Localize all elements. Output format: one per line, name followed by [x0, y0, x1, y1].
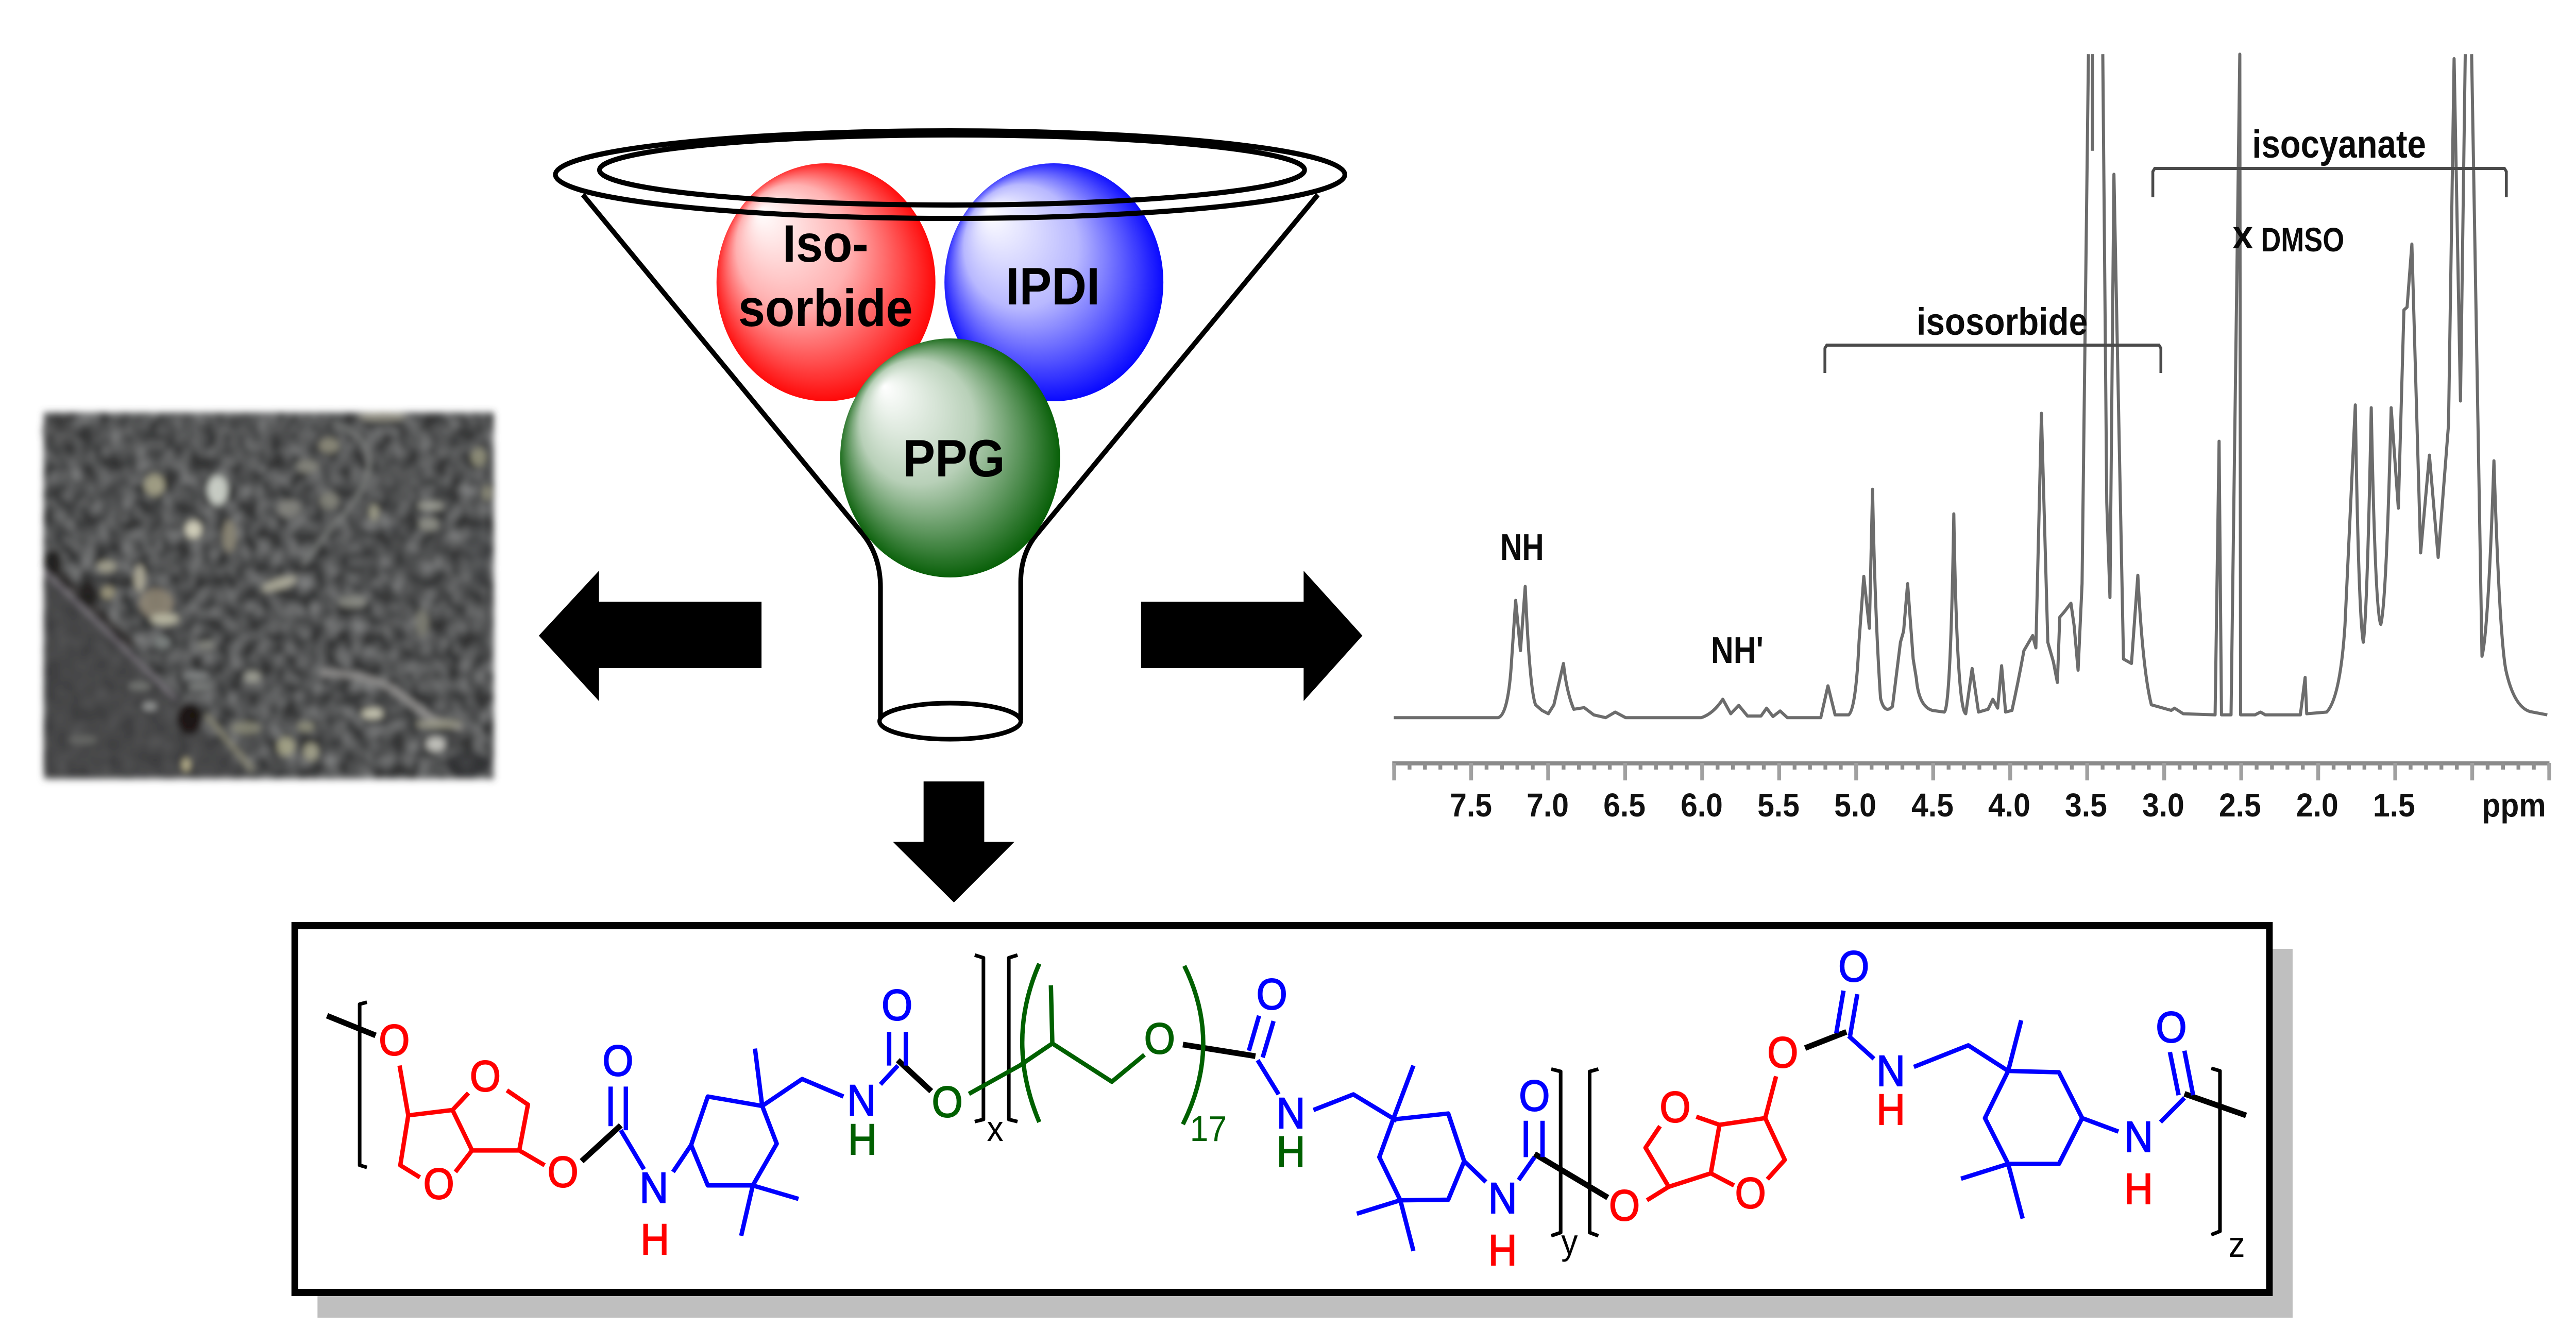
label: Iso-sorbide: sorbide: [738, 278, 913, 337]
atom labels: isosorbide segments: O: [470, 1052, 501, 1101]
arrow: left to micrograph: [539, 571, 761, 701]
atom labels: PPG segment: O: [1144, 1015, 1175, 1063]
atom labels: isosorbide segments: H: [1876, 1086, 1905, 1134]
subscript: 17: 17: [1190, 1109, 1227, 1149]
axis labels: 5.5: [1757, 787, 1800, 824]
atom labels: isocyanate segments: O: [1257, 970, 1287, 1019]
atom labels: isocyanate segments: N: [2124, 1113, 2153, 1162]
atom labels: PPG segment: H: [848, 1116, 877, 1164]
atom labels: isosorbide segments: O: [423, 1160, 454, 1208]
axis labels: 2.0: [2296, 787, 2338, 824]
atom labels: isosorbide segments: O: [548, 1148, 579, 1197]
atom labels: isocyanate segments: O: [602, 1037, 633, 1085]
atom labels: isosorbide segments: O: [1659, 1083, 1691, 1132]
atom labels: isocyanate segments: N: [847, 1077, 876, 1125]
axis labels: 7.5: [1450, 787, 1492, 824]
label: isocyanate: isocyanate: [2252, 123, 2426, 166]
bracket: isocyanate: [2153, 168, 2506, 197]
atom labels: isocyanate segments: N: [1876, 1047, 1905, 1096]
bonds: first half: [327, 955, 1397, 1236]
atom labels: isosorbide segments: O: [1609, 1182, 1640, 1230]
axis labels: 6.5: [1603, 787, 1646, 824]
spectrum trace: [1394, 54, 2547, 718]
axis labels: 5.0: [1834, 787, 1876, 824]
axis labels: 1.5: [2373, 787, 2415, 824]
atom labels: PPG segment: H: [1277, 1128, 1305, 1177]
axis labels: 6.0: [1681, 787, 1723, 824]
atom labels: PPG segment: [848, 1015, 1305, 1177]
axis labels: ppm: [2482, 787, 2546, 824]
atom labels: isocyanate segments: [602, 943, 2187, 1223]
NMR spectrum: [1392, 54, 2551, 824]
axis labels: 3.5: [2065, 787, 2107, 824]
structure panel: [295, 926, 2269, 1292]
label: NH: NH: [1500, 526, 1544, 568]
funnel outlet ellipse: [879, 703, 1021, 739]
axis labels: 7.0: [1527, 787, 1569, 824]
atom labels: isocyanate segments: N: [639, 1164, 668, 1213]
bonds: second half: [1357, 991, 2246, 1251]
axis labels: 3.0: [2142, 787, 2184, 824]
atom labels: PPG segment: O: [932, 1078, 963, 1127]
arrow: down to structure: [893, 781, 1014, 902]
atom labels: isocyanate segments: O: [1838, 943, 1869, 991]
subscript: x: x: [987, 1109, 1004, 1149]
reagent ball: isosorbide: [717, 163, 936, 401]
atom labels: isocyanate segments: N: [1488, 1174, 1517, 1223]
structure panel shadow: [317, 949, 2293, 1318]
atom labels: isosorbide segments: H: [640, 1216, 669, 1264]
reagent ball: IPDI: [944, 163, 1163, 401]
axis labels: [1450, 787, 2546, 824]
label: isosorbide: isosorbide: [1917, 301, 2088, 344]
atom labels: isosorbide segments: H: [2124, 1165, 2153, 1214]
axis labels: 2.5: [2219, 787, 2261, 824]
label: DMSO: DMSO: [2261, 222, 2344, 259]
reagent ball: PPG: [840, 338, 1060, 577]
atom labels: isosorbide segments: O: [1735, 1169, 1766, 1218]
atom labels: isosorbide segments: O: [379, 1016, 410, 1065]
atom labels: isosorbide segments: H: [1488, 1226, 1517, 1275]
atom labels: isocyanate segments: O: [1519, 1072, 1550, 1120]
atom labels: isocyanate segments: O: [2156, 1003, 2187, 1052]
atom labels: isosorbide segments: [379, 1016, 2153, 1275]
label: Iso-sorbide: Iso-: [783, 214, 869, 273]
atom labels: isocyanate segments: O: [882, 981, 912, 1030]
atom labels: isocyanate segments: N: [1277, 1089, 1305, 1138]
funnel cone and stem: [583, 195, 1318, 720]
subscript: z: z: [2228, 1225, 2245, 1265]
bracket: isosorbide: [1825, 345, 2161, 373]
arrow: right to spectrum: [1141, 571, 1362, 701]
marker: DMSO x: x: [2232, 212, 2253, 257]
funnel rim: [555, 131, 1345, 218]
label: NH prime: NH': [1711, 629, 1764, 671]
funnel with reagents: [555, 131, 1345, 739]
axis labels: 4.5: [1911, 787, 1954, 824]
micrograph image: [42, 413, 494, 779]
axis labels: 4.0: [1988, 787, 2030, 824]
ppm axis: [1392, 763, 2551, 824]
label: IPDI: IPDI: [1006, 257, 1100, 316]
subscript: y: y: [1561, 1222, 1578, 1263]
label: PPG: PPG: [903, 429, 1005, 488]
atom labels: isosorbide segments: O: [1767, 1029, 1798, 1077]
